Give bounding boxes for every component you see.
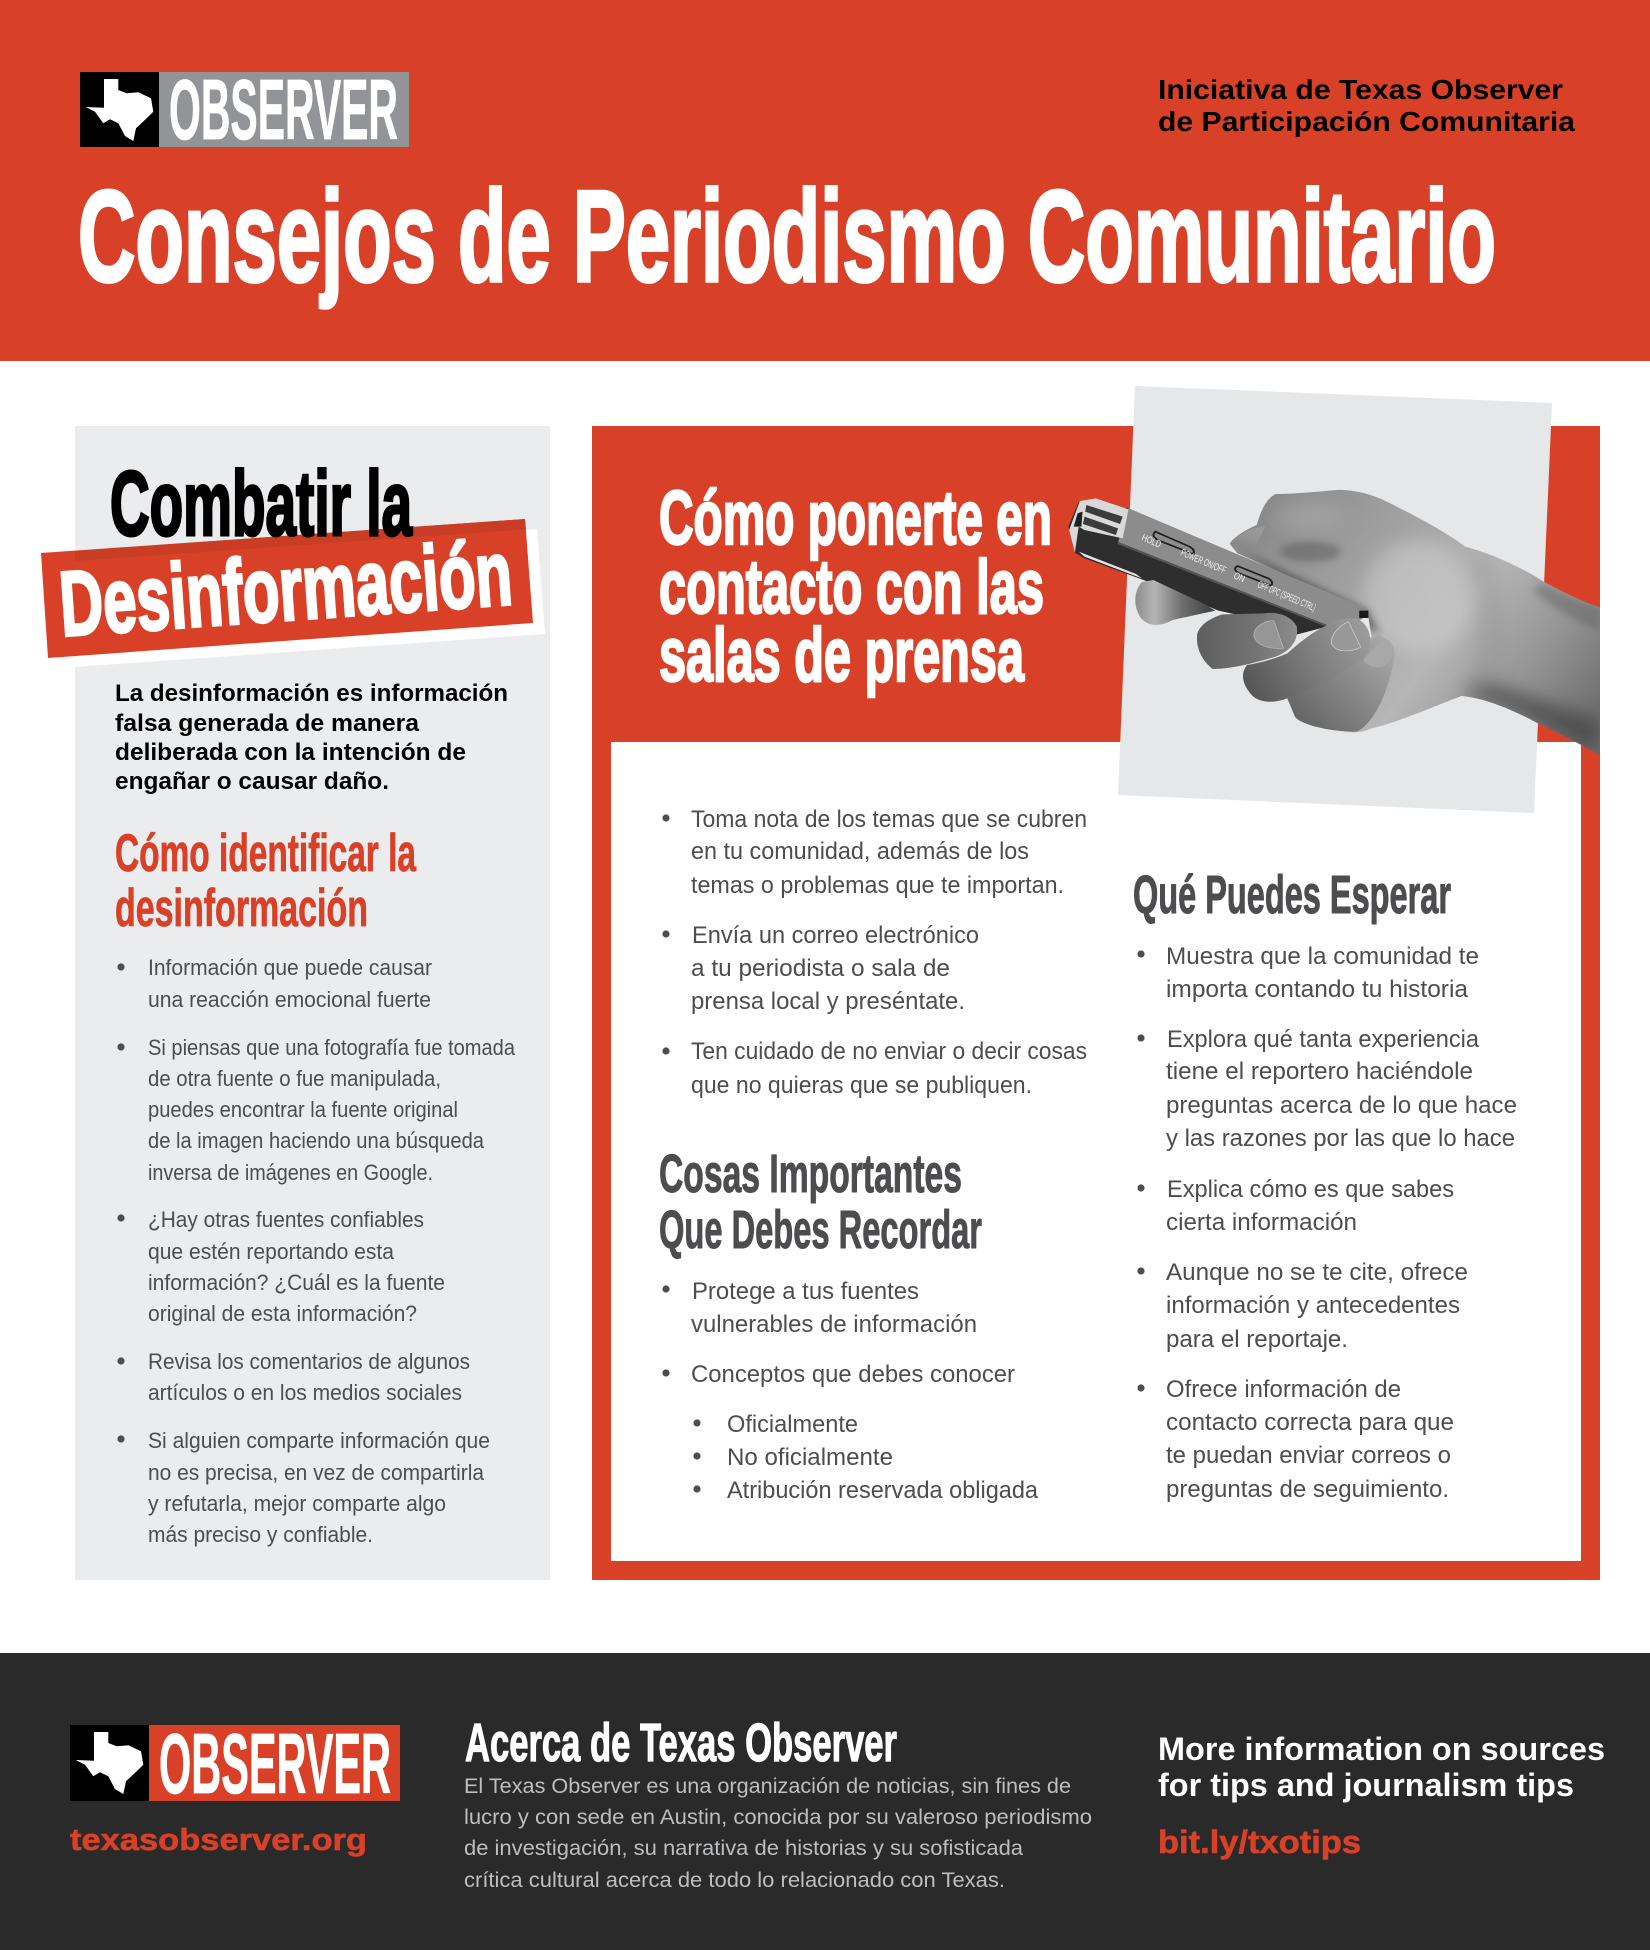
bullet list: qué puedes esperar: importa contando tu historia — [1166, 976, 1469, 1003]
intro text: deliberada con la intención de — [115, 739, 466, 766]
bullet list: qué puedes esperar: Muestra que la comunidad te — [1166, 943, 1479, 970]
finger: index — [1243, 618, 1370, 702]
bullet list: identificar: puedes encontrar la fuente original — [148, 1097, 458, 1122]
bullet list: cosas importantes: Oficialmente — [727, 1411, 858, 1438]
more information: More information on sources — [1158, 1731, 1605, 1767]
bullet list: contacto: Ten cuidado de no enviar o decir cosas — [691, 1038, 1087, 1065]
panel: salas de prensa — [592, 386, 1600, 1580]
bullet list: qué puedes esperar — [1137, 943, 1517, 1503]
more information — [1158, 1731, 1605, 1803]
bullet list: qué puedes esperar: preguntas acerca de lo que hace — [1166, 1092, 1517, 1119]
initiative label: de Participación Comunitaria — [1158, 106, 1575, 137]
panel: combatir la desinformación — [41, 426, 550, 1580]
finger behind — [1135, 580, 1215, 625]
bullet list: contacto: a tu periodista o sala de — [691, 955, 950, 982]
thumb tip — [1230, 526, 1265, 547]
intro text — [115, 680, 508, 795]
bullet list: qué puedes esperar: te puedan enviar correos o — [1166, 1442, 1451, 1469]
recorder body — [1068, 502, 1368, 635]
bullet list: identificar: Revisa los comentarios de algunos — [148, 1349, 470, 1374]
bullet list: contacto: Envía un correo electrónico — [692, 922, 979, 949]
bullet list: identificar: una reacción emocional fuerte — [148, 987, 431, 1012]
subheading: cómo identificar — [115, 824, 416, 938]
subheading: cómo identificar: desinformación — [115, 879, 368, 938]
logo: Observer grey — [80, 63, 409, 158]
recorder labels: ON — [1232, 571, 1246, 585]
bullet list: contacto: Toma nota de los temas que se cubren — [691, 806, 1087, 833]
bullet list: qué puedes esperar: preguntas de seguimiento. — [1166, 1476, 1449, 1503]
bullet list: identificar: Si piensas que una fotografía fue tomada — [148, 1035, 516, 1060]
tips link: bit.ly/txotips — [1158, 1824, 1361, 1860]
heading: cómo ponerte en contacto: salas de prensa — [659, 613, 1024, 698]
recorder labels — [1140, 533, 1317, 614]
bullet list: identificar: artículos o en los medios sociales — [148, 1380, 462, 1405]
bullet list: identificar: no es precisa, en vez de compartirla — [148, 1460, 485, 1485]
intro text: La desinformación es información — [115, 680, 508, 707]
grey photo card — [1118, 386, 1552, 813]
bullet list: identificar: información? ¿Cuál es la fuente — [148, 1270, 445, 1295]
bullet list: contacto — [662, 806, 1087, 1099]
recorder sliders — [1153, 532, 1272, 586]
bullet list: qué puedes esperar: tiene el reportero haciéndole — [1166, 1058, 1473, 1085]
bullet list: contacto: prensa local y preséntate. — [691, 988, 965, 1015]
bullet list: qué puedes esperar: Aunque no se te cite, ofrece — [1166, 1259, 1468, 1286]
bullet list: qué puedes esperar: información y antecedentes — [1166, 1292, 1460, 1319]
footer band — [0, 1653, 1650, 1950]
heading: cómo ponerte en contacto: Cómo ponerte en — [659, 476, 1052, 561]
bullet list: qué puedes esperar: Ofrece información de — [1166, 1376, 1401, 1403]
logo: Observer red: OBSERVER — [159, 1717, 391, 1812]
website link: texasobserver.org — [70, 1822, 367, 1857]
bullet list: qué puedes esperar: Explora qué tanta experiencia — [1167, 1026, 1480, 1053]
intro text: falsa generada de manera — [115, 710, 420, 737]
bullet list: qué puedes esperar: y las razones por las que lo hace — [1166, 1125, 1515, 1152]
banner: desinformación: Desinformación — [56, 522, 515, 656]
subheading: cosas importantes: Que Debes Recordar — [659, 1200, 982, 1260]
bullet list: identificar — [117, 955, 516, 1547]
more information: for tips and journalism tips — [1158, 1767, 1574, 1803]
bullet list: identificar: que estén reportando esta — [148, 1239, 395, 1264]
bullet list: identificar: de otra fuente o fue manipulada, — [148, 1066, 441, 1091]
initiative label: Iniciativa de Texas Observer — [1158, 74, 1563, 105]
recorder labels: OFF DPC (SPEED CTRL) — [1256, 580, 1317, 614]
bullet list: identificar: y refutarla, mejor comparte algo — [148, 1491, 446, 1516]
bullet list: identificar: más preciso y confiable. — [148, 1522, 373, 1547]
subheading: qué puedes esperar: Qué Puedes Esperar — [1133, 865, 1451, 925]
bullet list: identificar: inversa de imágenes en Google. — [148, 1160, 433, 1185]
bullet list: qué puedes esperar: Explica cómo es que sabes — [1167, 1176, 1454, 1203]
logo: Observer red — [70, 1717, 400, 1812]
bullet list: contacto: en tu comunidad, además de los — [691, 838, 1029, 865]
heading: cómo ponerte en contacto — [659, 476, 1052, 698]
subheading: cosas importantes: Cosas Importantes — [659, 1144, 962, 1204]
bullet list: qué puedes esperar: para el reportaje. — [1166, 1326, 1348, 1353]
finger: ring — [1287, 635, 1395, 732]
bullet list: cosas importantes: Atribución reservada obligada — [727, 1477, 1039, 1504]
heading: acerca de: Acerca de Texas Observer — [465, 1713, 897, 1773]
header band — [0, 0, 1650, 361]
banner: desinformación — [41, 519, 545, 668]
bullet list: identificar: original de esta información? — [148, 1301, 417, 1326]
recorder labels: HOLD — [1140, 533, 1163, 551]
bullet list: contacto: que no quieras que se publiquen. — [691, 1072, 1032, 1099]
about text — [464, 1774, 1092, 1892]
recorder mic head — [1069, 498, 1128, 553]
bullet list: qué puedes esperar: cierta información — [1166, 1209, 1357, 1236]
subheading: cosas importantes — [659, 1144, 982, 1260]
heading: combatir la: Combatir la — [110, 453, 412, 555]
bullet list: cosas importantes: Conceptos que debes conocer — [691, 1361, 1015, 1388]
bullet list: cosas importantes: No oficialmente — [727, 1444, 893, 1471]
bullet list: identificar: Si alguien comparte información que — [148, 1428, 490, 1453]
photo: hand holding recorder — [1068, 490, 1600, 755]
bullet list: qué puedes esperar: contacto correcta para que — [1166, 1409, 1454, 1436]
bullet list: identificar: de la imagen haciendo una búsqueda — [148, 1128, 485, 1153]
about text: El Texas Observer es una organización de noticias, sin fines de — [464, 1774, 1071, 1798]
finger: middle — [1197, 613, 1297, 669]
bullet list: cosas importantes: Protege a tus fuentes — [692, 1278, 919, 1305]
intro text: engañar o causar daño. — [115, 768, 389, 795]
recorder labels: POWER ON/OFF — [1179, 548, 1227, 577]
initiative label — [1158, 74, 1575, 137]
bullet list: cosas importantes — [662, 1278, 1039, 1504]
about text: de investigación, su narrativa de historias y su sofisticada — [464, 1836, 1023, 1860]
logo: Observer grey: OBSERVER — [169, 63, 398, 158]
about text: crítica cultural acerca de todo lo relacionado con Texas. — [464, 1868, 1005, 1892]
bullet list: contacto: temas o problemas que te importan. — [691, 872, 1064, 899]
bullet list: identificar: ¿Hay otras fuentes confiables — [148, 1207, 424, 1232]
bullet list: cosas importantes: vulnerables de información — [691, 1311, 977, 1338]
about text: lucro y con sede en Austin, conocida por su valeroso periodismo — [464, 1805, 1092, 1829]
subheading: cómo identificar: Cómo identificar la — [115, 824, 416, 883]
heading: cómo ponerte en contacto: contacto con las — [659, 545, 1044, 630]
bullet list: identificar: Información que puede causar — [148, 955, 432, 980]
